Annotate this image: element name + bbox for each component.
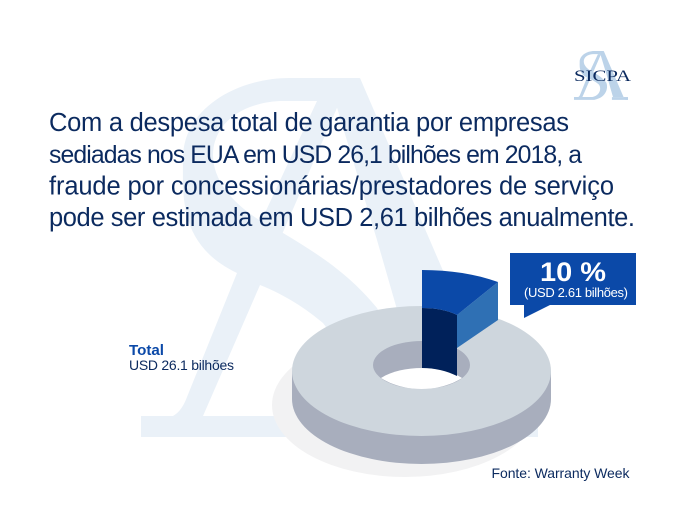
total label: USD 26.1 bilhões [129,357,234,373]
headline [49,109,635,232]
logo wordmark: SICPA [574,68,632,85]
callout amount: (USD 2.61 bilhões) [524,285,628,300]
callout box [510,253,636,318]
donut shadow [272,333,538,477]
headline: pode ser estimada em USD 2,61 bilhões anualmente. [49,204,635,232]
callout [510,253,636,318]
slice side face [457,282,498,348]
watermark monogram [141,78,538,437]
slice top face [422,270,498,315]
donut hole inner wall [373,341,470,389]
total label: Total [129,343,164,359]
logo [574,51,632,100]
slice inner dark face [422,308,457,376]
donut top face [292,306,551,436]
donut chart [292,270,551,464]
total label [129,343,234,373]
donut side wall [292,371,551,464]
headline: fraude por concessionárias/prestadores de serviço [49,172,614,200]
callout percentage: 10 % [540,257,606,287]
source: Fonte: Warranty Week [492,465,630,481]
headline: sediadas nos EUA em USD 26,1 bilhões em 2018, a [49,142,582,169]
headline: Com a despesa total de garantia por empresas [49,109,569,137]
logo monogram [574,51,628,100]
donut hole opening [381,368,462,389]
